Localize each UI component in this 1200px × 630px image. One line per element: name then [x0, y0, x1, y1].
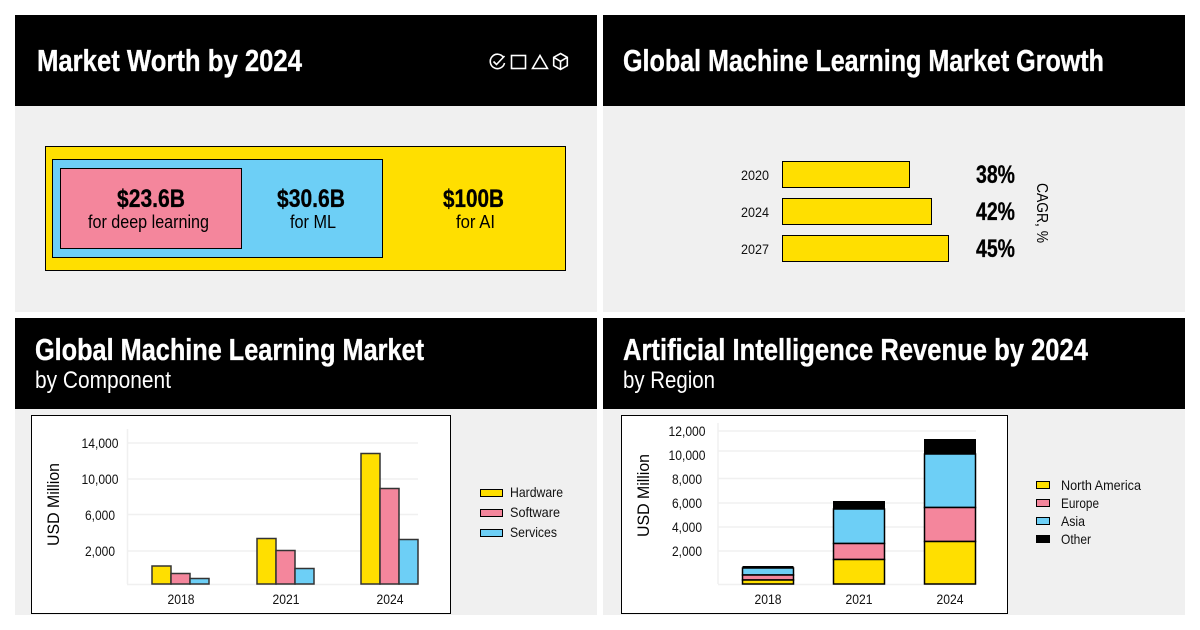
nested box: ML — [52, 160, 382, 258]
bars: 2018 — [152, 566, 209, 584]
legend: component: Hardware — [510, 484, 563, 500]
value: AI: $100B — [443, 185, 504, 213]
x axis labels: 2024 — [936, 591, 964, 607]
label: ML: for ML — [290, 212, 336, 232]
stack: 2018 — [742, 566, 794, 584]
axis title: USD Million — [634, 454, 653, 537]
y axis labels — [668, 423, 706, 559]
label: deep learning: for deep learning — [88, 212, 209, 232]
stack: 2021 — [833, 501, 885, 584]
x axis labels: 2018 — [754, 591, 782, 607]
row: 2024: 2024 — [741, 204, 769, 220]
row: 2024: 42% — [976, 198, 1015, 226]
x axis labels: 2021 — [846, 591, 873, 607]
y axis labels: 14,000 — [82, 435, 119, 451]
x axis labels: 2018 — [168, 591, 195, 607]
panel: revenue by region — [603, 318, 1185, 615]
icon: logo shapes — [490, 54, 567, 70]
title: by component: Global Machine Learning Market — [35, 332, 424, 367]
y axis labels: 2,000 — [85, 543, 115, 559]
header: market growth — [603, 15, 1185, 106]
y axis labels: 12,000 — [668, 423, 706, 439]
bar chart: CAGR — [741, 161, 1050, 263]
x axis labels — [168, 591, 404, 607]
legend: region: Other — [1061, 531, 1091, 547]
bars: 2024 — [361, 454, 418, 584]
nested box: AI — [46, 146, 566, 270]
legend: component: Services — [510, 524, 557, 540]
y axis labels — [82, 435, 119, 559]
x axis labels: 2024 — [376, 591, 404, 607]
row: 2020 — [741, 161, 1015, 189]
row: 2024 — [741, 198, 1015, 226]
legend: region: Asia — [1061, 513, 1085, 529]
title: by region: Artificial Intelligence Revenue by 2024 — [623, 332, 1089, 367]
title: market growth: Global Machine Learning Market Growth — [623, 43, 1104, 78]
label: AI: for AI — [456, 212, 495, 232]
title: market worth: Market Worth by 2024 — [37, 43, 303, 78]
axis label: CAGR: CAGR, % — [1033, 183, 1050, 243]
panel: market worth — [15, 15, 597, 312]
row: 2020: 2020 — [741, 167, 769, 183]
y axis labels: 10,000 — [82, 471, 119, 487]
legend: region: Europe — [1061, 495, 1099, 511]
y axis labels: 6,000 — [672, 495, 702, 511]
bars: 2021 — [257, 538, 314, 584]
header: revenue by region — [603, 318, 1185, 409]
y axis labels: 2,000 — [672, 543, 702, 559]
x axis labels — [754, 591, 964, 607]
chart card: by region — [622, 416, 1008, 614]
stacked bar chart — [634, 423, 976, 607]
chart card: by component — [32, 416, 450, 614]
header: market worth — [15, 15, 597, 106]
grouped bar chart — [44, 429, 418, 607]
value: ML: $30.6B — [277, 185, 345, 213]
legend: component: Software — [510, 504, 560, 520]
row: 2027: 2027 — [741, 241, 769, 257]
y axis labels: 6,000 — [85, 507, 115, 523]
row: 2020: 38% — [976, 161, 1015, 189]
legend: component — [480, 484, 563, 540]
value: deep learning: $23.6B — [117, 185, 185, 213]
row: 2027: 45% — [976, 235, 1015, 263]
axis title: USD Million — [44, 463, 63, 546]
header: market by component — [15, 318, 597, 409]
y axis labels: 4,000 — [672, 519, 702, 535]
panel: market by component — [15, 318, 597, 615]
legend: region — [1036, 477, 1141, 547]
y axis labels: 10,000 — [668, 447, 706, 463]
row: 2027 — [741, 235, 1015, 263]
subtitle: by component: by Component — [35, 367, 171, 394]
nested box: deep learning — [60, 168, 242, 248]
y axis labels: 8,000 — [672, 471, 702, 487]
subtitle: by region: by Region — [623, 367, 715, 394]
legend: region: North America — [1061, 477, 1141, 493]
x axis labels: 2021 — [272, 591, 300, 607]
stack: 2024 — [924, 439, 976, 584]
panel: market growth — [603, 15, 1185, 312]
